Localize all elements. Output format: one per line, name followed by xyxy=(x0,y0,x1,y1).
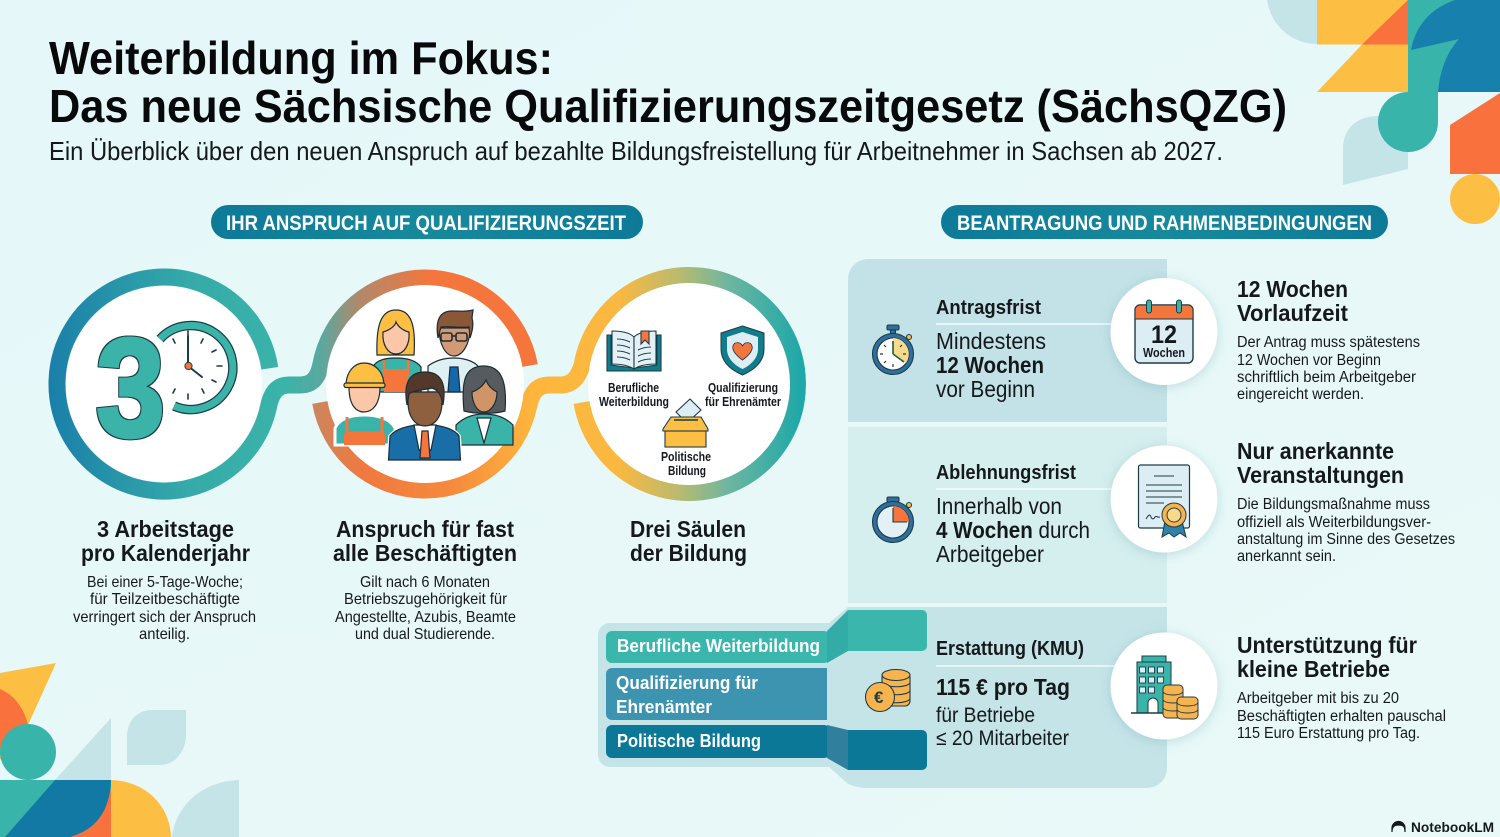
text block: Unterstützung für kleine Betriebe: Beschäftigten erhalten pauschal xyxy=(1237,708,1446,725)
title: Weiterbildung im Fokus: xyxy=(49,32,553,84)
text block: Nur anerkannte Veranstaltungen: Nur anerkannte xyxy=(1237,438,1394,464)
text block: 3 Arbeitstage: anteilig. xyxy=(139,626,190,643)
text block: Nur anerkannte Veranstaltungen: offiziell als Weiterbildungsver- xyxy=(1237,514,1431,531)
panel: Erstattung with pillar bands xyxy=(598,607,1167,788)
label: Politische Bildung: Bildung xyxy=(668,464,706,478)
text block: Drei Säulen: Drei Säulen xyxy=(630,516,746,542)
text block: Drei Säulen xyxy=(630,516,747,566)
band: Qualifizierung für Ehrenämter: Qualifizierung für xyxy=(616,673,758,693)
panel: three-day circle xyxy=(66,286,262,482)
text block: Anspruch für fast alle: und dual Studierende. xyxy=(355,626,495,643)
icon: open book xyxy=(607,331,661,371)
panel: Ablehnungsfrist xyxy=(848,427,1167,603)
text block: 3 Arbeitstage: Bei einer 5-Tage-Woche; xyxy=(87,574,243,591)
text block: Nur anerkannte Veranstaltungen xyxy=(1237,438,1455,565)
text block: Anspruch für fast alle: Gilt nach 6 Monaten xyxy=(360,574,490,591)
text: 115 Euro pro Tag: ≤ 20 Mitarbeiter xyxy=(936,727,1069,750)
icon: calendar badge: Wochen xyxy=(1143,345,1185,360)
label: Berufliche Weiterbildung: Weiterbildung xyxy=(599,395,669,409)
label: Antragsfrist: Antragsfrist xyxy=(936,297,1041,319)
text block: Unterstützung für kleine Betriebe: Unterstützung für xyxy=(1237,632,1417,658)
band: Politische Bildung xyxy=(606,725,927,770)
icon: euro coins: € xyxy=(874,688,884,707)
section heading: Anspruch xyxy=(211,205,643,239)
label: Ablehnungsfrist: Ablehnungsfrist xyxy=(936,462,1076,484)
text block: 3 Arbeitstage: verringert sich der Anspruch xyxy=(73,609,256,626)
label: Qualifizierung für Ehrenämter: für Ehrenämter xyxy=(705,395,781,409)
decoration: top right shapes xyxy=(1267,0,1500,224)
label: Qualifizierung für Ehrenämter: Qualifizierung xyxy=(708,381,778,395)
text block: Nur anerkannte Veranstaltungen: anerkannt sein. xyxy=(1237,548,1336,565)
connected rings xyxy=(57,276,797,492)
icon: calendar badge xyxy=(1110,278,1218,385)
text block: Unterstützung für kleine Betriebe xyxy=(1237,632,1446,742)
band: Politische Bildung: Politische Bildung xyxy=(617,731,761,751)
label: Berufliche Weiterbildung: Berufliche xyxy=(608,381,659,395)
icon: certificate badge xyxy=(1110,446,1218,552)
text block: 3 Arbeitstage: 3 Arbeitstage xyxy=(97,516,234,542)
text block: 12 Wochen Vorlaufzeit: eingereicht werden. xyxy=(1237,386,1364,403)
icon: stopwatch two xyxy=(872,497,914,542)
text block: Unterstützung für kleine Betriebe: kleine Betriebe xyxy=(1237,656,1390,682)
text block: Unterstützung für kleine Betriebe: 115 Euro Erstattung pro Tag. xyxy=(1237,725,1420,742)
text: Mindestens 12 Wochen vor Beginn: vor Beginn xyxy=(936,376,1035,402)
title: Das neue Sächsische Qualifizierungszeitgesetz (SächsQZG) xyxy=(49,80,1287,132)
text block: Nur anerkannte Veranstaltungen: anstaltung im Sinne des Gesetzes xyxy=(1237,531,1455,548)
label: Politische Bildung: Politische xyxy=(661,450,711,464)
logo: NotebookLM: NotebookLM xyxy=(1411,819,1494,835)
panel: employee group circle xyxy=(326,285,524,483)
text block: Anspruch für fast alle: Anspruch für fast xyxy=(336,516,514,542)
text: Mindestens 12 Wochen vor Beginn: Mindestens xyxy=(936,328,1046,354)
text block: 3 Arbeitstage: pro Kalenderjahr xyxy=(81,540,250,566)
text: Innerhalb von 4 Wochen xyxy=(936,493,1090,567)
icon: shield with heart xyxy=(721,326,764,375)
section heading: Beantragung xyxy=(941,205,1388,239)
text: 115 Euro pro Tag xyxy=(936,674,1070,750)
icon: stopwatch one xyxy=(872,325,914,374)
icon: ballot box xyxy=(663,399,708,447)
text: Innerhalb von 4 Wochen: Innerhalb von xyxy=(936,493,1062,519)
icon: woman dark hair xyxy=(456,366,513,445)
panel: three pillars circle xyxy=(588,283,790,485)
text: Mindestens 12 Wochen vor Beginn: 12 Wochen xyxy=(936,352,1044,378)
text block: Nur anerkannte Veranstaltungen: Veranstaltungen xyxy=(1237,462,1404,488)
text block: Anspruch für fast alle: Betriebszugehörigkeit für xyxy=(344,591,508,608)
text block: 12 Wochen Vorlaufzeit: Der Antrag muss spätestens xyxy=(1237,334,1420,351)
text block: Nur anerkannte Veranstaltungen: Die Bildungsmaßnahme muss xyxy=(1237,496,1430,513)
text: 115 Euro pro Tag: 115 € pro Tag xyxy=(936,674,1070,700)
text block: 12 Wochen Vorlaufzeit: schriftlich beim Arbeitgeber xyxy=(1237,369,1416,386)
text block: Drei Säulen: der Bildung xyxy=(630,540,747,566)
decoration: bottom left shapes xyxy=(0,663,239,837)
icon: clock xyxy=(150,326,233,410)
icon: woman blonde xyxy=(373,310,421,392)
text block: Unterstützung für kleine Betriebe: Arbeitgeber mit bis zu 20 xyxy=(1237,690,1399,707)
section heading: Anspruch: IHR ANSPRUCH AUF QUALIFIZIERUNGSZEIT xyxy=(226,212,626,235)
icon: worker with helmet xyxy=(335,363,395,445)
text block: Anspruch für fast alle xyxy=(333,516,517,643)
text block: 12 Wochen Vorlaufzeit xyxy=(1237,276,1420,403)
section heading: Beantragung: BEANTRAGUNG UND RAHMENBEDINGUNGEN xyxy=(957,212,1372,235)
text: 115 Euro pro Tag: für Betriebe xyxy=(936,704,1035,727)
title xyxy=(49,32,1287,132)
icon: man in suit xyxy=(388,372,461,460)
label: Erstattung: Erstattung (KMU) xyxy=(936,638,1084,660)
icon: calendar badge: 12 xyxy=(1151,321,1177,349)
icon: man with glasses xyxy=(428,310,478,392)
text: Mindestens 12 Wochen vor Beginn xyxy=(936,328,1046,402)
text block: 12 Wochen Vorlaufzeit: Vorlaufzeit xyxy=(1237,300,1348,326)
text block: Anspruch für fast alle: alle Beschäftigten xyxy=(333,540,517,566)
text block: 12 Wochen Vorlaufzeit: 12 Wochen xyxy=(1237,276,1348,302)
label: Berufliche Weiterbildung xyxy=(599,381,669,409)
band: Berufliche Weiterbildung: Berufliche Weiterbildung xyxy=(617,636,820,656)
panel: Antragsfrist xyxy=(848,259,1167,422)
text block: Anspruch für fast alle: Angestellte, Azubis, Beamte xyxy=(335,609,516,626)
label: Politische Bildung xyxy=(661,450,711,478)
text block: 3 Arbeitstage xyxy=(73,516,256,643)
label: Qualifizierung für Ehrenämter xyxy=(705,381,781,409)
text block: 3 Arbeitstage: für Teilzeitbeschäftigte xyxy=(90,591,240,608)
subtitle: Ein Überblick über den neuen Anspruch auf bezahlte Bildungsfreistellung für Arbeitnehmer in Sachsen ab 2027. xyxy=(49,136,1223,166)
band: Berufliche Weiterbildung xyxy=(606,610,927,663)
text block: 12 Wochen Vorlaufzeit: 12 Wochen vor Beginn xyxy=(1237,352,1381,369)
icon: building with coins badge xyxy=(1110,632,1218,740)
icon: euro coins xyxy=(866,670,910,712)
icon: number three: 3 xyxy=(96,309,165,466)
text: Innerhalb von 4 Wochen: Arbeitgeber xyxy=(936,541,1044,567)
text: Innerhalb von 4 Wochen: 4 Wochen durch xyxy=(936,517,1090,543)
band: Qualifizierung für Ehrenämter: Ehrenämter xyxy=(616,697,712,717)
band: Qualifizierung für Ehrenämter xyxy=(606,668,827,720)
